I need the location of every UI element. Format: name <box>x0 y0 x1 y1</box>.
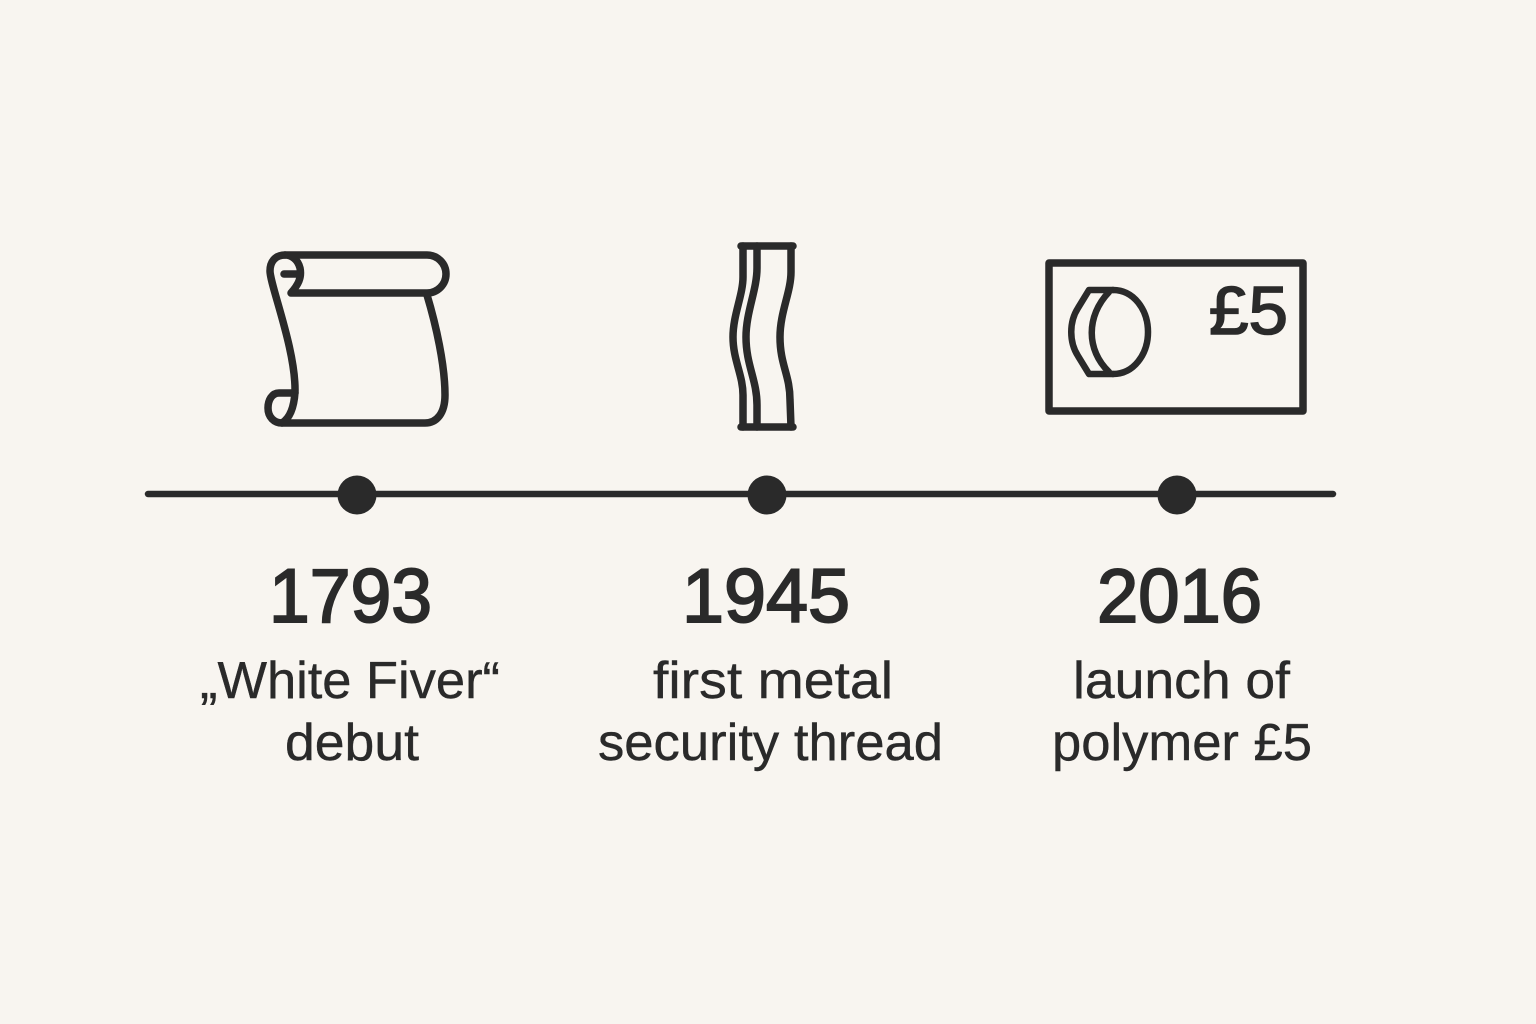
note value: £5 <box>1209 273 1288 349</box>
description 1945: first metal <box>653 652 893 710</box>
marker: 1793 <box>338 476 376 514</box>
marker: 1945 <box>748 476 786 514</box>
note outline <box>1049 263 1303 411</box>
timeline axis <box>148 476 1333 514</box>
year 1945: 1945 <box>682 554 850 639</box>
description 1945: security thread <box>598 714 943 772</box>
marker: 2016 <box>1158 476 1196 514</box>
description 1793: debut <box>285 714 420 772</box>
event: 1945 <box>598 554 943 772</box>
year 2016: 2016 <box>1097 554 1262 639</box>
event: 2016 <box>1052 554 1312 772</box>
event: 1793 <box>200 554 500 772</box>
year 1793: 1793 <box>269 554 432 639</box>
description 1793 <box>200 652 500 772</box>
description 2016 <box>1052 652 1312 772</box>
description 2016: launch of <box>1073 652 1291 710</box>
description 1945 <box>598 652 943 772</box>
icon: polymer £5 note <box>1049 263 1303 411</box>
icon: paper scroll <box>268 255 446 423</box>
note window <box>1071 290 1148 374</box>
icon: wavy security thread <box>733 246 793 427</box>
description 2016: polymer £5 <box>1052 714 1312 772</box>
description 1793: „White Fiver“ <box>200 652 500 710</box>
